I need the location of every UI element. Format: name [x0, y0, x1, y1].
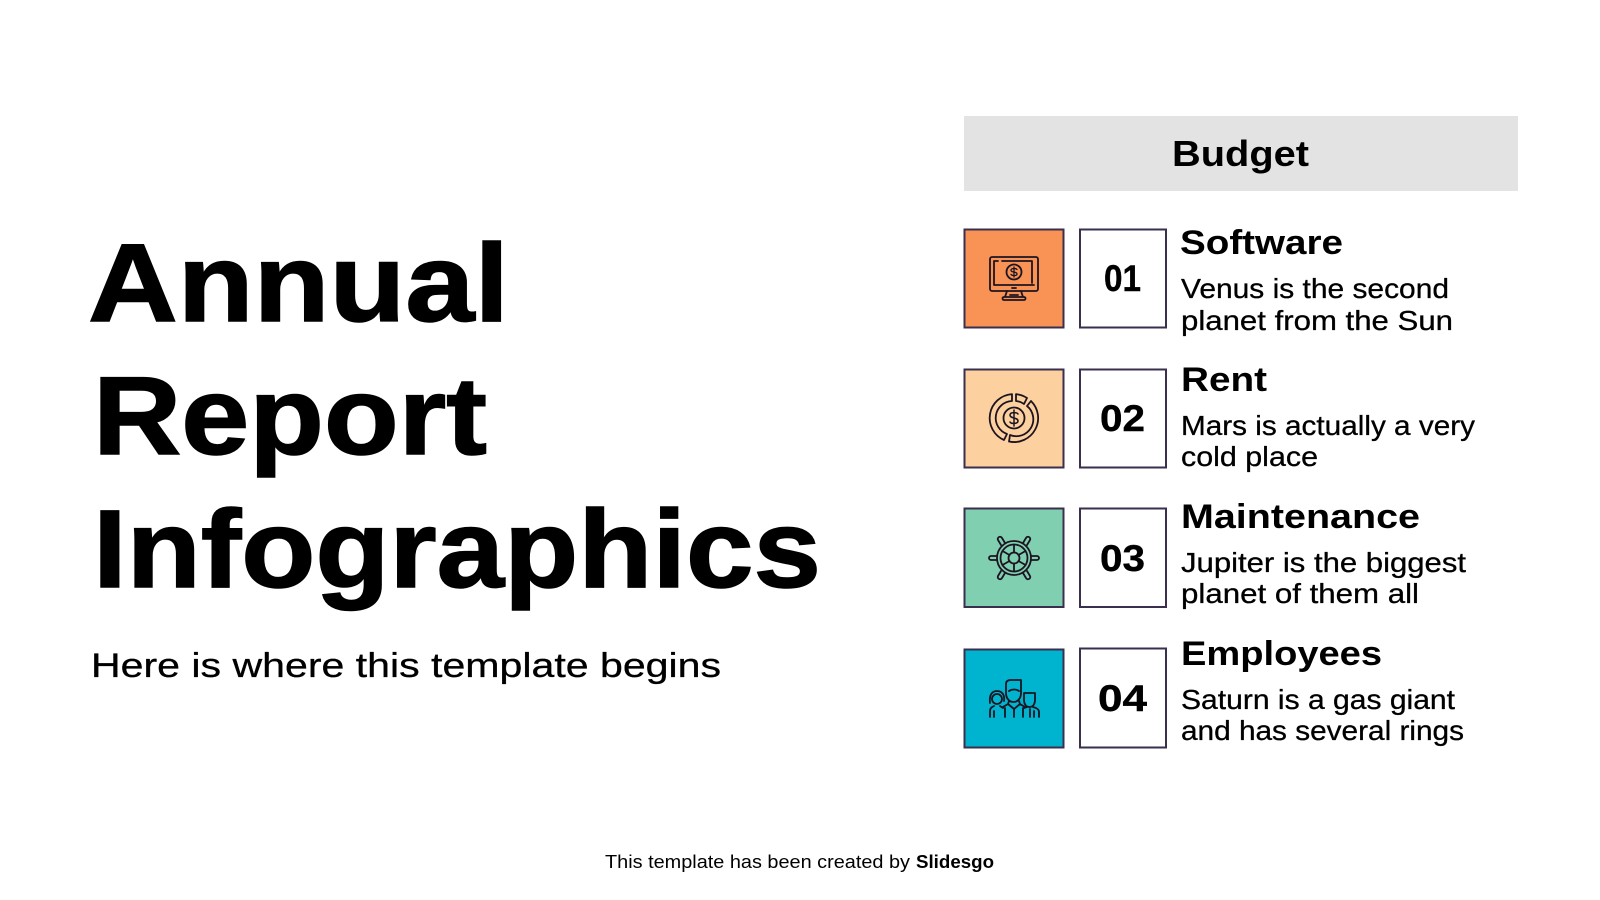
subtitle: Here is where this template begins: [91, 647, 721, 685]
row: software: [964, 224, 1453, 336]
description: software: [1181, 273, 1453, 336]
number 01: 01: [1104, 258, 1141, 299]
heading: software: Software: [1180, 224, 1343, 262]
row: maintenance: [964, 498, 1466, 609]
number 04: [1080, 648, 1166, 748]
description: rent: Mars is actually a very: [1181, 410, 1475, 441]
number 02: [1080, 370, 1166, 468]
description: employees: Saturn is a gas giant: [1181, 684, 1455, 715]
description: software: Venus is the second: [1181, 273, 1449, 304]
panel: budget: [964, 116, 1518, 748]
title: Report: [93, 355, 487, 478]
heading: maintenance: Maintenance: [1181, 498, 1420, 536]
heading: rent: Rent: [1181, 361, 1267, 399]
description: rent: [1181, 410, 1475, 472]
description: maintenance: Jupiter is the biggest: [1181, 547, 1466, 578]
footer credit: This template has been created by: [605, 852, 910, 872]
description: rent: cold place: [1181, 441, 1318, 472]
icon: three people: [964, 650, 1064, 748]
number 03: 03: [1100, 538, 1145, 579]
number 02: 02: [1100, 398, 1145, 439]
row: employees: [964, 635, 1464, 748]
budget header: Budget: [1172, 133, 1309, 174]
heading: employees: Employees: [1181, 635, 1382, 673]
budget header: [964, 116, 1518, 191]
number 04: 04: [1098, 678, 1148, 719]
description: employees: [1181, 684, 1464, 746]
description: maintenance: planet of them all: [1181, 578, 1419, 609]
number 01: [1080, 230, 1166, 328]
title: [88, 222, 821, 611]
icon: ship wheel: [964, 508, 1064, 607]
row: rent: [964, 361, 1475, 472]
footer credit: Slidesgo: [916, 852, 994, 872]
description: maintenance: [1181, 547, 1466, 609]
title: Infographics: [93, 488, 821, 611]
icon: dollar donut chart: [964, 370, 1064, 468]
number 03: [1080, 508, 1166, 607]
description: software: planet from the Sun: [1181, 305, 1453, 336]
title: Annual: [88, 222, 509, 345]
description: employees: and has several rings: [1181, 715, 1464, 746]
icon: monitor with dollar: [964, 230, 1064, 328]
